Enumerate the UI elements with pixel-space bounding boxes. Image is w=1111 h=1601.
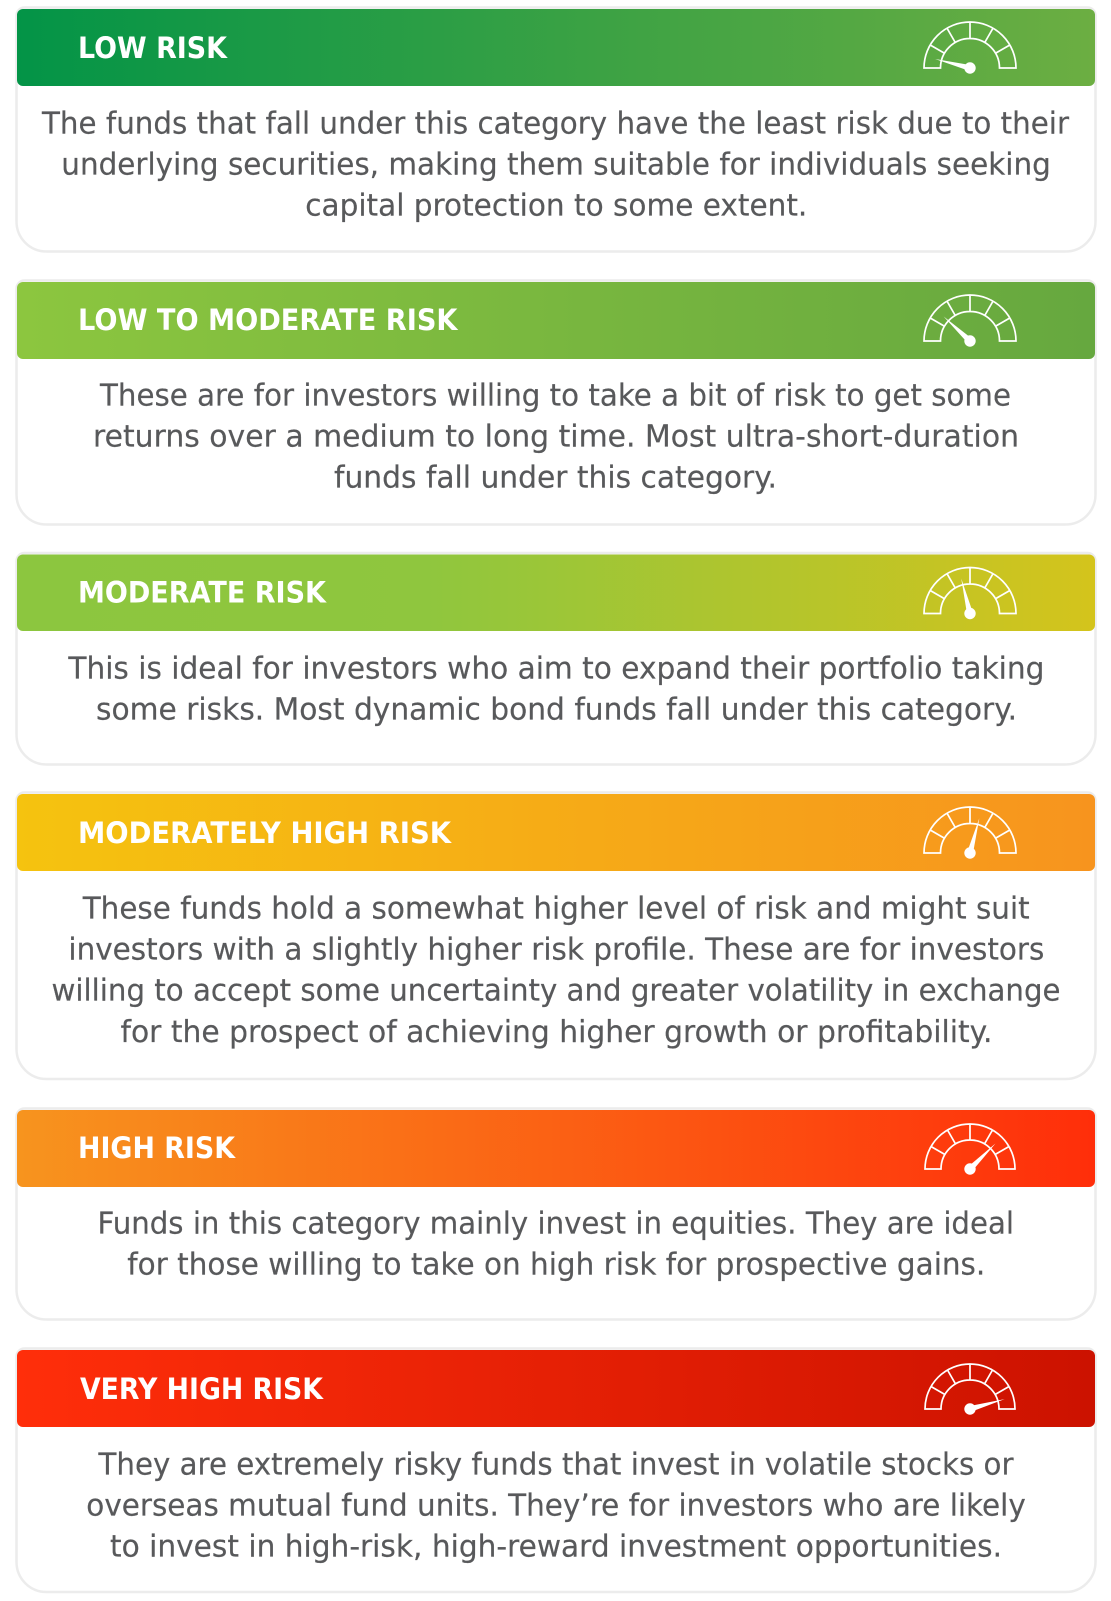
text: low risk description: The funds that fall under this category have the least risk due to their <box>41 106 1069 142</box>
text: low to moderate description: returns over a medium to long time. Most ultra-short-duration <box>93 420 1019 454</box>
header bar: moderately high risk <box>17 794 1095 871</box>
text: low to moderate description <box>93 378 1019 496</box>
text: moderately high description: for the prospect of achieving higher growth or profitability. <box>120 1015 992 1050</box>
text: low to moderate description: These are for investors willing to take a bit of risk to get some <box>99 378 1011 414</box>
text: moderate description <box>67 652 1044 728</box>
text: very high description: They are extremely risky funds that invest in volatile stocks or <box>98 1448 1014 1482</box>
text: low risk description: capital protection to some extent. <box>305 188 807 224</box>
icon: gauge very high <box>925 1364 1015 1415</box>
text: very high description: to invest in high-risk, high-reward investment opportunities. <box>110 1530 1002 1564</box>
icon: gauge moderate <box>924 568 1016 619</box>
panel: low to moderate risk <box>16 280 1096 524</box>
text: moderately high description: These funds hold a somewhat higher level of risk and might suit <box>82 892 1030 926</box>
header bar: high risk <box>17 1110 1095 1187</box>
text: high description: Funds in this category mainly invest in equities. They are ideal <box>98 1206 1014 1242</box>
icon: gauge high <box>925 1124 1015 1175</box>
heading: high risk: HIGH RISK <box>78 1131 236 1165</box>
text: moderate description: This is ideal for investors who aim to expand their portfolio taking <box>67 652 1044 686</box>
header bar: low to moderate risk <box>17 282 1095 359</box>
text: high description <box>98 1206 1014 1282</box>
icon: gauge low <box>924 22 1016 74</box>
text: high description: for those willing to take on high risk for prospective gains. <box>127 1248 985 1282</box>
heading: moderately high risk: MODERATELY HIGH RISK <box>78 816 452 850</box>
header bar: moderate risk <box>17 554 1095 631</box>
panel: moderately high risk <box>16 792 1096 1079</box>
heading: low risk: LOW RISK <box>78 31 228 65</box>
panel: high risk <box>16 1108 1096 1320</box>
text: moderately high description: willing to accept some uncertainty and greater volatility in exchange <box>52 974 1060 1008</box>
icon: gauge low to moderate <box>924 295 1016 347</box>
text: very high description <box>86 1448 1026 1564</box>
icon: gauge moderately high <box>924 807 1016 859</box>
text: very high description: overseas mutual fund units. They’re for investors who are likely <box>86 1488 1026 1524</box>
panel: moderate risk <box>16 553 1096 764</box>
heading: low to moderate risk: LOW TO MODERATE RISK <box>78 303 459 337</box>
text: low risk description <box>41 106 1069 224</box>
text: low to moderate description: funds fall under this category. <box>334 460 777 496</box>
heading: moderate risk: MODERATE RISK <box>78 576 327 610</box>
header bar: low risk <box>17 9 1095 86</box>
text: moderately high description <box>52 892 1060 1050</box>
text: low risk description: underlying securities, making them suitable for individuals seeking <box>61 148 1051 182</box>
heading: very high risk: VERY HIGH RISK <box>80 1372 324 1406</box>
text: moderately high description: investors with a slightly higher risk profile. These are for investors <box>68 932 1044 968</box>
panel: very high risk <box>16 1348 1096 1592</box>
text: moderate description: some risks. Most dynamic bond funds fall under this category. <box>96 692 1017 728</box>
header bar: very high risk <box>17 1350 1095 1427</box>
panel: low risk <box>16 8 1096 252</box>
